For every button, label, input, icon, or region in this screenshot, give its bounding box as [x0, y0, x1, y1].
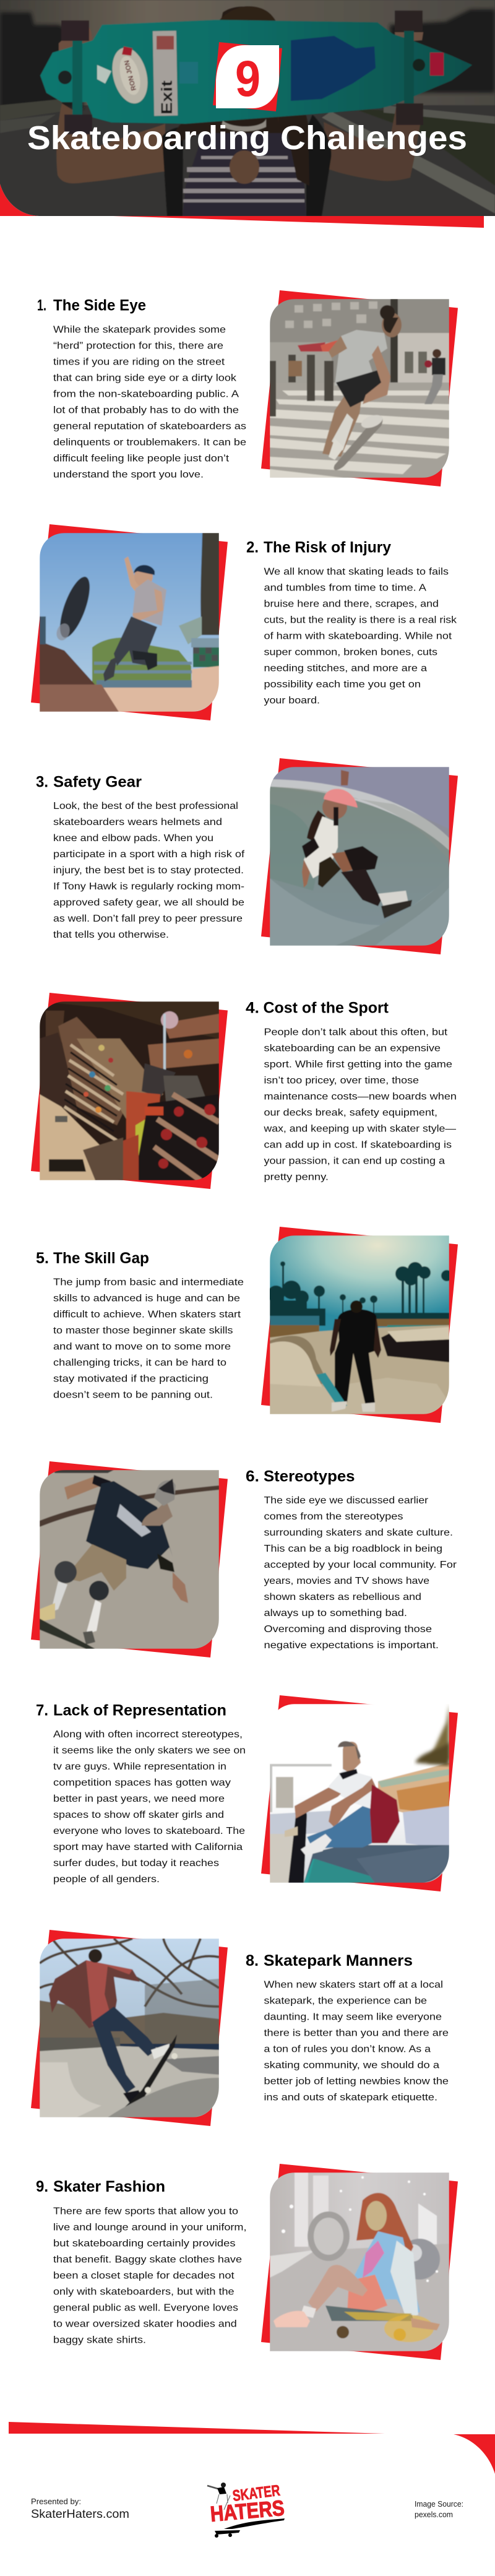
body text: a ton of rules you don’t know. As a	[264, 2044, 431, 2055]
number badge	[213, 42, 282, 111]
heading: Skatepark Manners	[264, 1952, 413, 1969]
panel: 7 Lack of Representation	[36, 1695, 458, 1891]
body text: your board.	[264, 696, 320, 706]
body text: sport. While first getting into the game	[264, 1059, 452, 1070]
body text: needing stitches, and more are a	[264, 663, 427, 674]
body text	[53, 324, 246, 480]
body text: super common, broken bones, cuts	[264, 647, 437, 658]
skater	[124, 556, 142, 592]
photo: woman sitting on a skateboard with disco lights	[261, 2164, 458, 2360]
body text: daunting. It may seem like everyone	[264, 2012, 442, 2023]
body text: that can bring side eye or a dirty look	[53, 373, 237, 384]
body text: accepted by your local community. For	[264, 1560, 457, 1570]
body text: If Tony Hawk is regularly rocking mom-	[53, 881, 244, 892]
body text: been a closet staple for decades not	[53, 2270, 235, 2281]
photo: man at a beachside skatepark	[261, 1227, 458, 1423]
footer: presented by: SkaterHaters.com	[31, 2507, 129, 2521]
photo: skater in concrete bowl	[31, 1461, 228, 1658]
man	[329, 1770, 372, 1809]
body text: skatepark, the experience can be	[264, 1996, 427, 2007]
skater	[307, 810, 325, 841]
body text: from the non-skateboarding public. A	[53, 389, 239, 400]
body text: challenging tricks, it can be hard to	[53, 1358, 226, 1368]
heading: Stereotypes	[264, 1467, 355, 1485]
footer divider accents	[9, 2422, 495, 2474]
heading: Cost of the Sport	[264, 1000, 389, 1017]
heading: 2.	[246, 538, 259, 556]
body text: difficult to achieve. When skaters start	[53, 1310, 241, 1320]
body text: tv are guys. While representation in	[53, 1761, 226, 1772]
heading: 5.	[36, 1250, 49, 1267]
body text: and want to move on to some more	[53, 1342, 231, 1352]
floating skateboard	[59, 576, 90, 638]
body text: sport may have started with California	[53, 1842, 243, 1852]
body text: there is better than you and there are	[264, 2028, 449, 2039]
number badge: 9	[235, 51, 260, 107]
body text: People don’t talk about this often, but	[264, 1027, 448, 1037]
body text: skating community, we should do a	[264, 2060, 439, 2071]
body text: This can be a big roadblock in being	[264, 1544, 442, 1554]
logo: Skater Haters: SKATER	[231, 2482, 281, 2505]
body text: general public as well. Everyone loves	[53, 2302, 238, 2313]
footer: image source: pexels.com	[415, 2510, 453, 2519]
footer: image source	[415, 2500, 463, 2519]
body text: We all know that skating leads to fails	[264, 567, 449, 577]
skater	[64, 1477, 111, 1500]
body text: Overcoming and disproving those	[264, 1624, 432, 1635]
body text: only with skateboarders, but with the	[53, 2286, 235, 2297]
skateboard	[325, 2306, 413, 2321]
ledge	[304, 1845, 449, 1883]
body text: “herd” protection for this, there are	[53, 340, 223, 352]
body text	[53, 1729, 246, 1885]
photo: man sitting on a ledge with backpack	[261, 1695, 458, 1891]
body text: cuts, but the reality is there is a real risk	[264, 615, 457, 626]
panel: hero header	[0, 0, 495, 228]
hero photo: girl holding a teal longboard behind her head: Exit	[158, 80, 176, 115]
body text	[264, 1495, 457, 1651]
body text: There are few sports that allow you to	[53, 2206, 238, 2216]
man	[335, 1309, 378, 1406]
panel: 5 The Skill Gap	[36, 1227, 458, 1423]
body text: that tells you otherwise.	[53, 930, 169, 940]
body text: years, movies and TV shows have	[264, 1576, 429, 1586]
photo: skater jumping off a ramp	[31, 524, 228, 720]
longboard deck	[40, 20, 472, 124]
body text: people of all genders.	[53, 1874, 160, 1885]
heading: 8.	[246, 1952, 259, 1969]
body text: When new skaters start off at a local	[264, 1980, 443, 1990]
photo: skate shop board wall	[31, 993, 228, 1189]
body text: better job of letting newbies know the	[264, 2077, 449, 2087]
body text: delinquents or troublemakers. It can be	[53, 437, 246, 448]
body text: doesn’t seem to be panning out.	[53, 1390, 213, 1400]
skateboard	[288, 1811, 307, 1883]
heading: The Risk of Injury	[264, 538, 391, 556]
logo: Skater Haters: HATERS	[209, 2496, 285, 2526]
body text: competition spaces has gotten way	[53, 1778, 231, 1788]
body text: possibility each time you get on	[264, 680, 421, 690]
body text: of harm with skateboarding. While not	[264, 631, 452, 642]
heading: Safety Gear	[53, 773, 142, 790]
heading: Lack of Representation	[53, 1701, 226, 1719]
logo: Skater Haters	[207, 2482, 285, 2538]
heading: 6.	[246, 1467, 259, 1485]
panel: 9 Skater Fashion	[36, 2164, 458, 2360]
body text	[53, 801, 245, 940]
panel: 2 The Risk of Injury	[31, 524, 457, 720]
backpack straps and tank top	[162, 127, 183, 216]
heading: The Side Eye	[53, 297, 146, 314]
panel: 8 Skatepark Manners	[31, 1930, 449, 2126]
title: Skateboarding Challenges	[27, 119, 467, 157]
body text: to wear oversized skater hoodies and	[53, 2319, 237, 2329]
body text: surrounding skaters and skate culture.	[264, 1528, 453, 1538]
body text: wax, and keeping up with skater style—	[263, 1123, 456, 1134]
body text: negative expectations is important.	[264, 1640, 439, 1651]
surf shop sticker: RON JON	[123, 59, 138, 92]
body text: approved safety gear, we all should be	[53, 897, 244, 908]
body text: to master those beginner skate skills	[53, 1326, 233, 1336]
body text: general reputation of skateboarders as	[53, 421, 246, 432]
body text: The jump from basic and intermediate	[53, 1277, 244, 1287]
body text: skills to advanced is huge and can be	[53, 1294, 240, 1303]
backpack	[370, 1784, 400, 1843]
body text: shown skaters as rebellious and	[264, 1592, 421, 1602]
body text: While the skatepark provides some	[53, 324, 226, 335]
footer: presented by: Presented by:	[31, 2497, 81, 2506]
body text	[53, 1277, 244, 1400]
hair and face	[162, 6, 309, 186]
skater	[322, 392, 363, 457]
body text: understand the sport you love.	[53, 469, 204, 480]
panel: 3 Safety Gear	[36, 758, 458, 954]
body text: always up to something bad.	[264, 1608, 407, 1619]
body text: isn’t too pricey, over time, those	[264, 1075, 419, 1086]
body text: difficult feeling like people just don’t	[53, 453, 230, 464]
panel: 4 Cost of the Sport	[31, 993, 457, 1189]
body text: can add up in cost. If skateboarding is	[264, 1139, 452, 1150]
icon: skater figure	[207, 2483, 230, 2510]
body text: Look, the best of the best professional	[53, 801, 238, 811]
body text: pretty penny.	[264, 1172, 329, 1182]
body text: baggy skate shirts.	[53, 2335, 146, 2345]
body text: bruise here and there, scrapes, and	[264, 599, 439, 610]
body text: it seems like the only skaters we see on	[53, 1745, 246, 1756]
body text: skateboarders wears helmets and	[53, 817, 222, 828]
small stickers	[430, 53, 444, 76]
body text: comes from the stereotypes	[264, 1511, 403, 1522]
heading: The Skill Gap	[53, 1250, 149, 1267]
panel: 6 Stereotypes	[31, 1461, 457, 1658]
panel: 1 The Side Eye	[37, 290, 458, 486]
footer: image source: Image Source:	[415, 2500, 463, 2509]
body text: maintenance costs—new boards when	[264, 1091, 457, 1102]
body text: lot of that probably has to do with the	[53, 405, 239, 416]
skater	[49, 1960, 140, 2028]
body text: that benefit. Baggy skate clothes have	[53, 2254, 242, 2265]
exit sticker	[153, 31, 178, 116]
heading: 3.	[36, 773, 48, 790]
red accent: corner and strip behind hero	[0, 184, 484, 228]
body text: surfer dudes, but today it reaches	[53, 1858, 219, 1869]
woman	[432, 358, 446, 375]
arms	[56, 103, 165, 183]
body text: participate in a sport with a high risk of	[53, 849, 245, 860]
body text: everyone who loves to skateboard. The	[53, 1826, 245, 1836]
body text	[264, 567, 457, 706]
body text	[264, 1980, 449, 2103]
body text: times if you are riding on the street	[53, 357, 225, 368]
body text: as well. Don’t fall prey to peer pressure	[53, 914, 243, 924]
body text	[53, 2206, 247, 2345]
photo: skater on a crosswalk	[261, 290, 458, 486]
body text: stay motivated if the practicing	[53, 1374, 209, 1384]
body text: The side eye we discussed earlier	[264, 1495, 429, 1506]
heading: Skater Fashion	[53, 2178, 165, 2195]
woman	[356, 2193, 413, 2256]
body text: ins and outs of skatepark etiquette.	[264, 2093, 437, 2103]
body text: injury, the best bet is to stay protected.	[53, 865, 244, 876]
body text	[263, 1027, 457, 1182]
footer: presented by	[31, 2497, 129, 2521]
heading: 7.	[36, 1701, 48, 1719]
body text: your passion, it can end up costing a	[264, 1156, 445, 1166]
body text: knee and elbow pads. When you	[53, 833, 213, 844]
body text: but skateboarding certainly provides	[53, 2238, 236, 2249]
heading: 1.	[37, 297, 46, 314]
icon: brush swoosh and skateboard	[215, 2518, 285, 2538]
body text: better in past years, we need more	[53, 1794, 225, 1804]
photo: skater in plaid shirt grinding a ramp	[31, 1930, 228, 2126]
body text: Along with often incorrect stereotypes,	[53, 1729, 243, 1740]
surf shop sticker	[111, 47, 148, 104]
heading: 9.	[36, 2178, 48, 2195]
body text: and tumbles from time to time. A	[264, 583, 426, 594]
photo: girl in pink helmet skating a bowl	[261, 758, 458, 954]
hero photo: girl holding a teal longboard behind her head	[0, 0, 495, 216]
trucks and wheels	[72, 38, 82, 116]
body text: live and lounge around in your uniform,	[53, 2222, 247, 2232]
body text: spaces to show off skater girls and	[53, 1810, 224, 1820]
heading: 4.	[246, 1000, 259, 1017]
body text: our decks break, safety equipment,	[264, 1107, 437, 1118]
blue flower sticker	[291, 36, 376, 101]
body text: skateboarding can be an expensive	[264, 1043, 441, 1053]
